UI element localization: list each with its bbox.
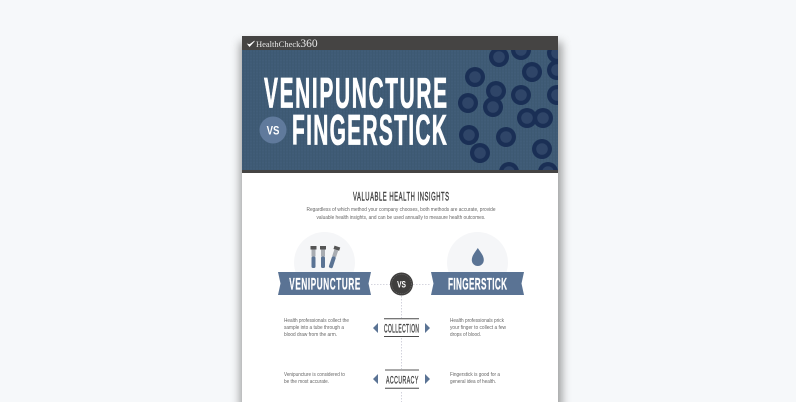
vs circle (390, 272, 413, 296)
ribbon: fingerstick (431, 272, 524, 295)
venipuncture collection text: Health professionals collect the (284, 318, 349, 324)
blood cells (458, 50, 558, 170)
icon: blood drop (472, 248, 484, 266)
collection label: COLLECTION (384, 322, 419, 335)
venipuncture collection text: blood draw from the arm. (284, 332, 337, 338)
collection label (373, 318, 430, 338)
left icon circle (294, 232, 355, 293)
venipuncture accuracy text: Venipuncture is considered to (284, 372, 345, 378)
intro text: Regardless of which method your company chooses, both methods are accurate, provide (306, 207, 496, 213)
vs badge: VS (267, 125, 279, 138)
fingerstick accuracy text: Fingerstick is good for a (450, 372, 500, 378)
section heading: VALUABLE HEALTH INSIGHTS (353, 191, 449, 205)
icon: test tubes (310, 246, 340, 269)
vs circle: VS (397, 279, 406, 290)
page shadow (240, 42, 562, 402)
ribbon: fingerstick: FINGERSTICK (448, 274, 507, 293)
ribbon: venipuncture: VENIPUNCTURE (289, 274, 360, 293)
fingerstick collection text: your finger to collect a few (450, 325, 506, 331)
icon: check mark (248, 41, 254, 46)
infographic page (242, 36, 558, 402)
fingerstick collection text (450, 318, 506, 338)
accuracy label: ACCURACY (386, 373, 418, 386)
header banner (242, 50, 558, 170)
venipuncture collection text: sample into a tube through a (284, 325, 344, 331)
accuracy label (373, 369, 430, 391)
fingerstick accuracy text: general idea of health. (450, 379, 496, 385)
venipuncture collection text (284, 318, 349, 338)
row: collection (284, 318, 506, 338)
venipuncture accuracy text (284, 372, 345, 385)
right icon circle (447, 232, 508, 293)
banner bottom strip (242, 170, 558, 173)
row: accuracy (284, 369, 500, 391)
center dotted line (371, 284, 431, 402)
fingerstick collection text: drops of blood. (450, 332, 481, 338)
title line 1: VENIPUNCTURE (264, 70, 447, 118)
intro text: valuable health insights, and can be used annually to measure health outcomes. (316, 215, 486, 221)
venipuncture accuracy text: be the most accurate. (284, 379, 329, 385)
fingerstick collection text: Health professionals prick (450, 318, 504, 324)
title line 2: FINGERSTICK (292, 107, 447, 155)
logo text: HealthCheck360 (256, 38, 318, 50)
top bar with logo (242, 36, 558, 50)
vs badge (260, 116, 286, 144)
ribbon: venipuncture (278, 272, 371, 295)
intro text (306, 207, 496, 221)
fingerstick accuracy text (450, 372, 500, 385)
